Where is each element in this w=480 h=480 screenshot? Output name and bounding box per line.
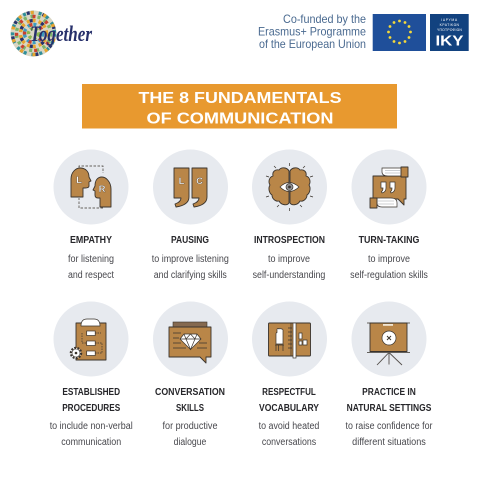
icon: quotation marks: L bbox=[179, 176, 185, 187]
panel: respectful vocabulary bbox=[252, 302, 327, 448]
panel: practice in natural settings: different situations bbox=[352, 437, 426, 448]
title banner: THE 8 FUNDAMENTALS bbox=[138, 90, 342, 107]
icon: two heads: R bbox=[99, 184, 106, 195]
panel: practice in natural settings: to raise confidence for bbox=[346, 421, 433, 432]
icon: quotation marks: C bbox=[196, 176, 203, 187]
logo: IKY bbox=[430, 14, 469, 51]
panel: conversation skills: dialogue bbox=[174, 437, 207, 448]
icon: notebook with hand bbox=[268, 323, 310, 358]
panel: turn-taking bbox=[350, 150, 428, 281]
panel: turn-taking: to improve bbox=[368, 254, 410, 265]
panel: empathy bbox=[54, 150, 128, 281]
logo: IKY: ΚΡΑΤΙΚΩΝ bbox=[440, 23, 460, 27]
panel: pausing: PAUSING bbox=[171, 235, 209, 246]
title banner bbox=[82, 84, 397, 128]
logo: Together bbox=[10, 10, 92, 56]
icon: EU flag bbox=[373, 14, 426, 51]
panel: introspection: self-understanding bbox=[253, 270, 325, 281]
panel: established procedures: ESTABLISHED bbox=[62, 387, 120, 398]
panel: established procedures bbox=[50, 302, 133, 448]
panel: empathy: and respect bbox=[68, 270, 114, 281]
title banner: OF COMMUNICATION bbox=[146, 110, 334, 128]
panel: pausing: to improve listening bbox=[152, 254, 229, 265]
panel: introspection: INTROSPECTION bbox=[254, 235, 325, 246]
icon: brain with eye bbox=[266, 163, 313, 211]
icon: two heads bbox=[71, 166, 111, 208]
co-funding text bbox=[258, 12, 366, 51]
panel: respectful vocabulary: to avoid heated bbox=[259, 421, 319, 432]
icon: presentation board bbox=[367, 323, 410, 365]
icon: clipboard with gear bbox=[71, 319, 106, 360]
panel: empathy: EMPATHY bbox=[70, 235, 112, 246]
icon: two heads: L bbox=[76, 175, 82, 186]
co-funding text: Erasmus+ Programme bbox=[258, 24, 366, 38]
panel: introspection: to improve bbox=[268, 254, 310, 265]
panel: respectful vocabulary: conversations bbox=[262, 437, 316, 448]
icon: quotation marks bbox=[174, 168, 207, 207]
panel: turn-taking: TURN-TAKING bbox=[359, 235, 420, 246]
panel: practice in natural settings: NATURAL SETTINGS bbox=[347, 403, 432, 414]
panel: conversation skills: SKILLS bbox=[176, 403, 204, 414]
logo: IKY: ΙΔΡΥΜΑ bbox=[441, 18, 458, 22]
icon: mosaic circle bbox=[10, 10, 56, 56]
panel: respectful vocabulary: RESPECTFUL bbox=[262, 387, 316, 398]
panel: conversation skills bbox=[153, 302, 228, 448]
panel: established procedures: to include non-verbal bbox=[50, 421, 133, 432]
logo: IKY: IKY bbox=[436, 34, 464, 50]
icon: speech bubble with diamond bbox=[169, 322, 211, 363]
panel: empathy: for listening bbox=[68, 254, 114, 265]
panel: practice in natural settings bbox=[346, 302, 433, 448]
panel: pausing bbox=[152, 150, 229, 281]
panel: practice in natural settings: PRACTICE IN bbox=[362, 387, 416, 398]
panel: conversation skills: for productive bbox=[162, 421, 218, 432]
wordmark: Together bbox=[30, 21, 92, 46]
panel: turn-taking: self-regulation skills bbox=[350, 270, 428, 281]
logo: IKY: ΥΠΟΤΡΟΦΙΩΝ bbox=[437, 28, 462, 32]
panel: conversation skills: CONVERSATION bbox=[155, 387, 225, 398]
co-funding text: of the European Union bbox=[259, 37, 366, 51]
co-funding text: Co-funded by the bbox=[283, 12, 366, 26]
icon: speech bubble with hands bbox=[370, 167, 408, 208]
panel: pausing: and clarifying skills bbox=[154, 270, 227, 281]
panel: introspection bbox=[252, 150, 327, 281]
panel: established procedures: PROCEDURES bbox=[62, 403, 120, 414]
panel: established procedures: communication bbox=[61, 437, 121, 448]
panel: respectful vocabulary: VOCABULARY bbox=[259, 403, 319, 414]
